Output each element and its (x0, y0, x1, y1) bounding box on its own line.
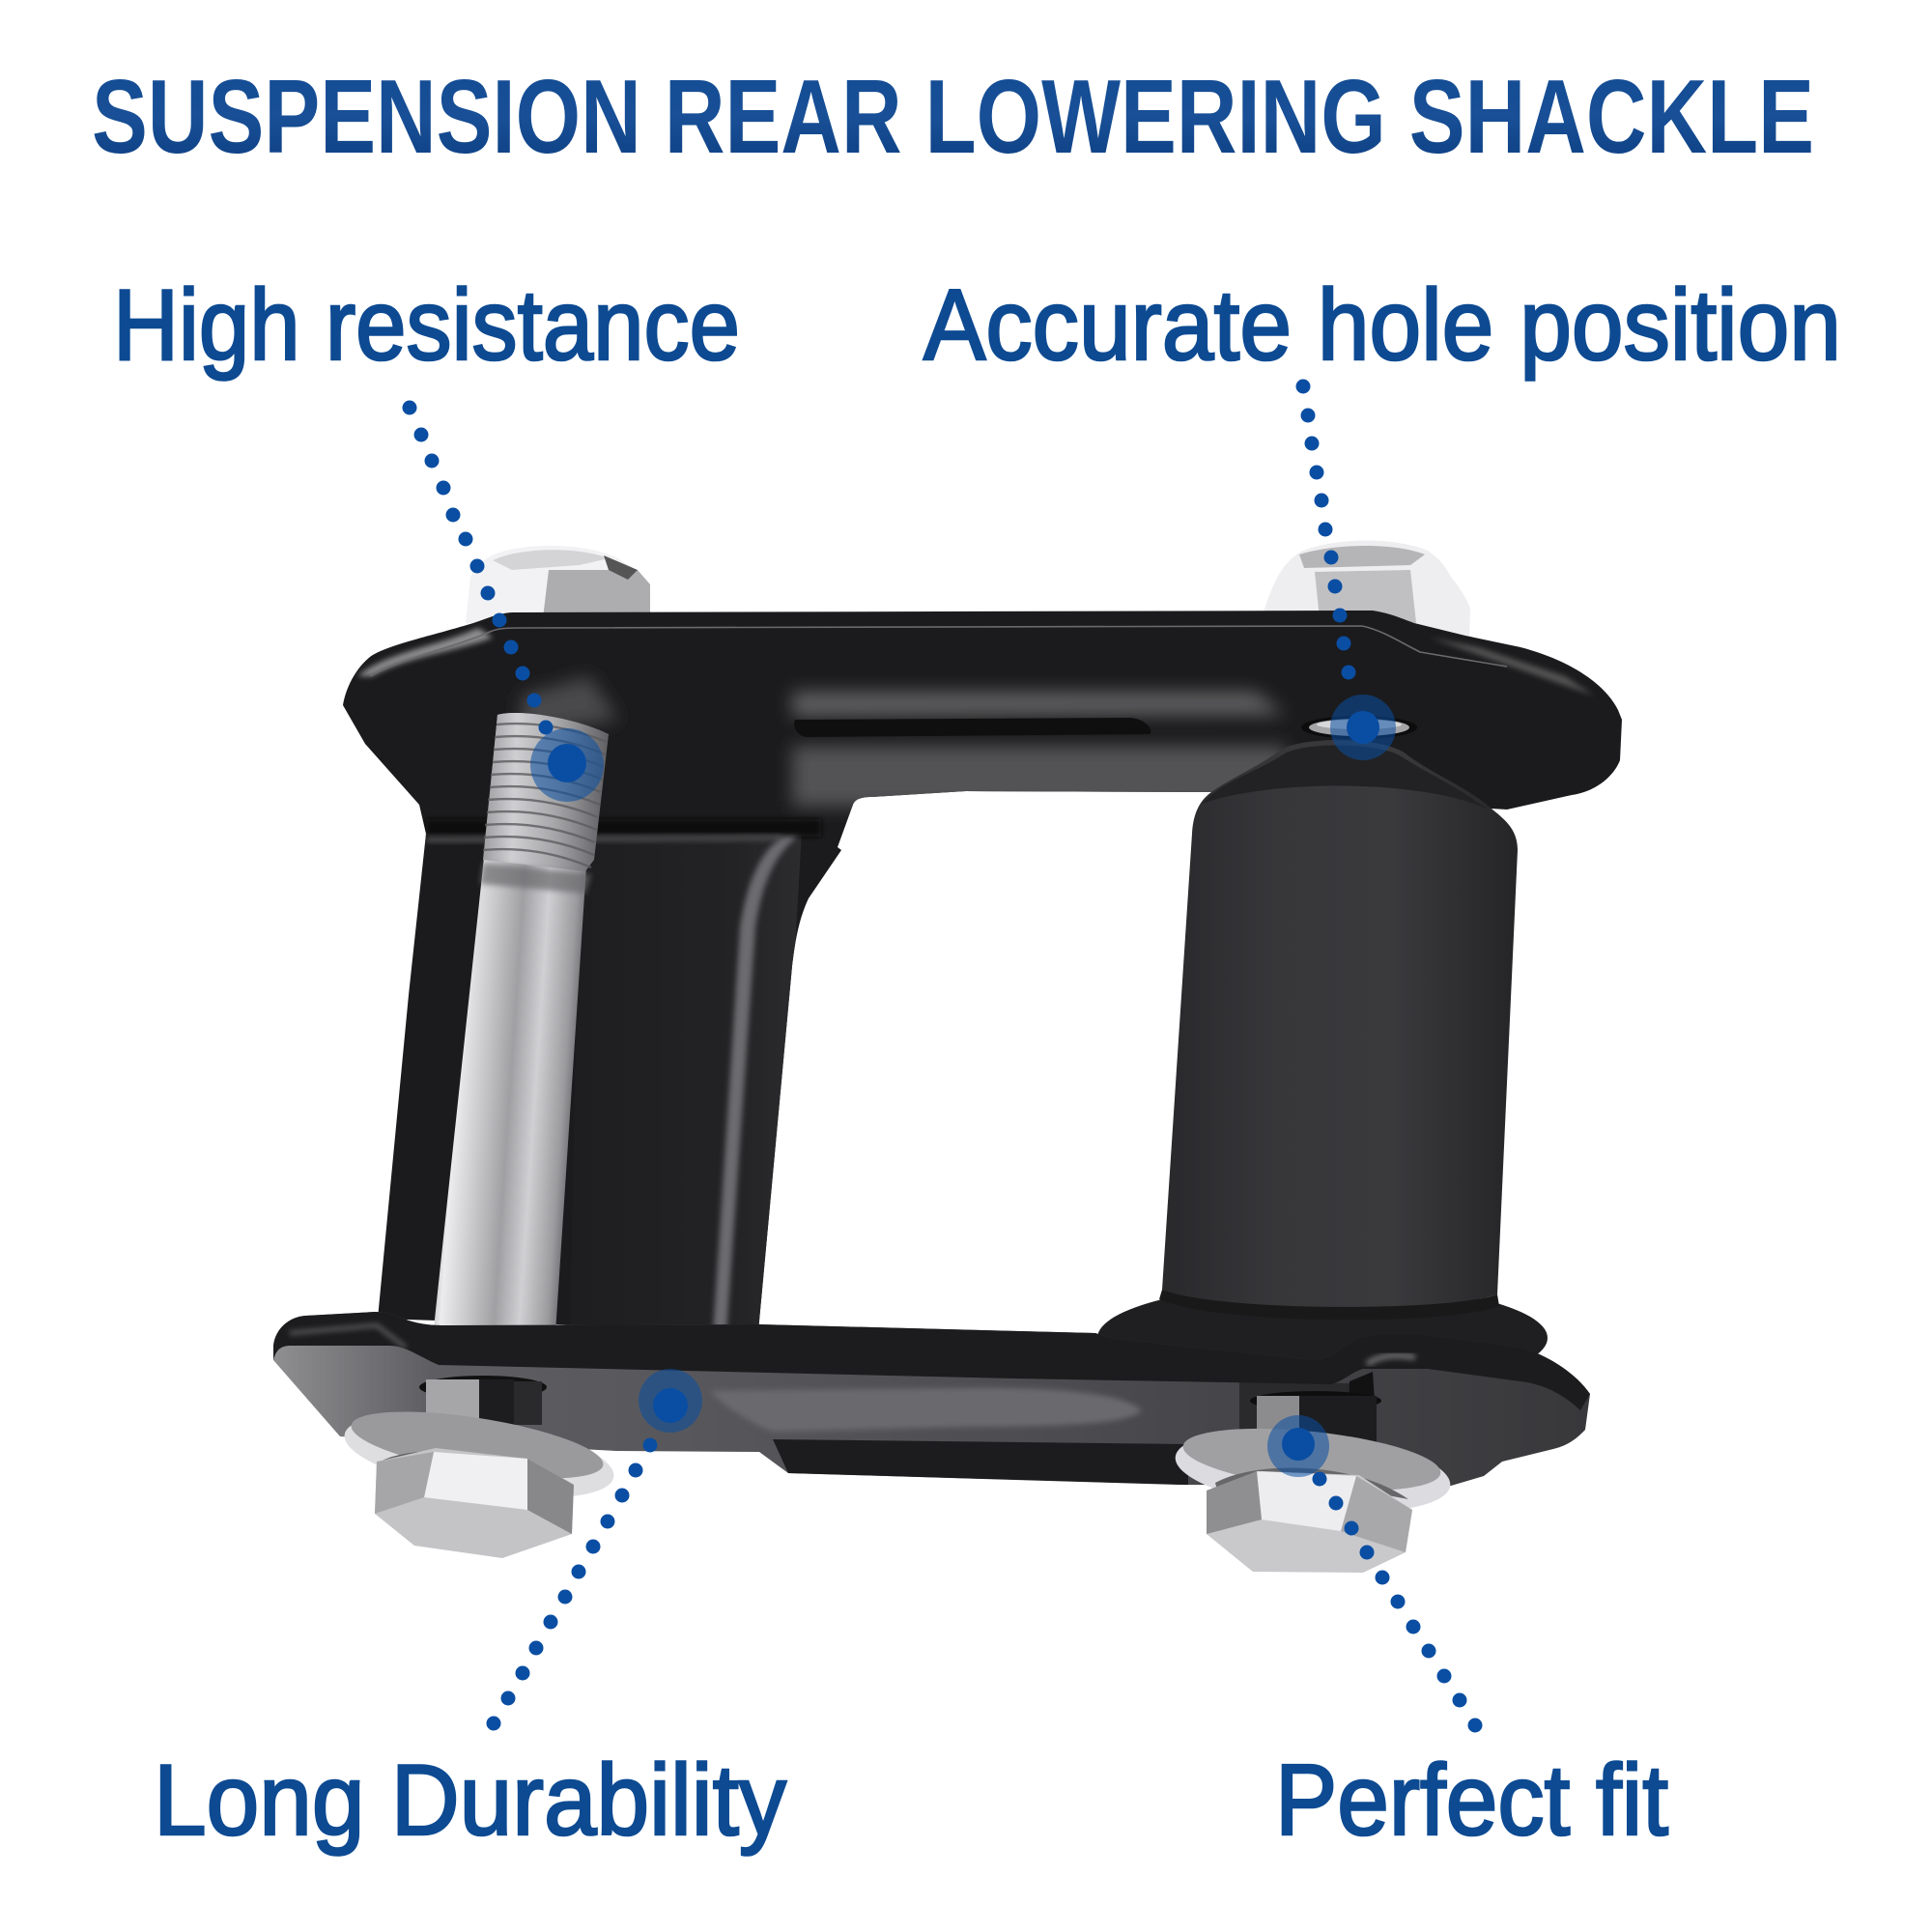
bolt shaft with thread (434, 713, 609, 1333)
label: accurate hole position: Accurate hole position (923, 270, 1841, 382)
label: perfect fit: Perfect fit (1275, 1745, 1668, 1857)
rubber bushing (1097, 740, 1548, 1393)
label: long durability: Long Durability (154, 1745, 786, 1857)
label: high resistance: High resistance (113, 270, 740, 382)
bottom left bolt and washer (339, 1376, 619, 1558)
top plate and leg (343, 611, 1622, 1333)
callout dots: long durability (487, 1369, 702, 1731)
top right washer (1301, 716, 1417, 739)
shackle product image (273, 541, 1622, 1573)
bottom plate (273, 1312, 1590, 1486)
top right nut (1262, 541, 1470, 642)
top left nut (466, 546, 650, 623)
callout dots: high resistance (402, 400, 604, 802)
callout dots: perfect fit (1267, 1415, 1482, 1733)
callout dots: accurate hole position (1296, 379, 1396, 760)
bottom right bolt and washer (1172, 1391, 1454, 1573)
